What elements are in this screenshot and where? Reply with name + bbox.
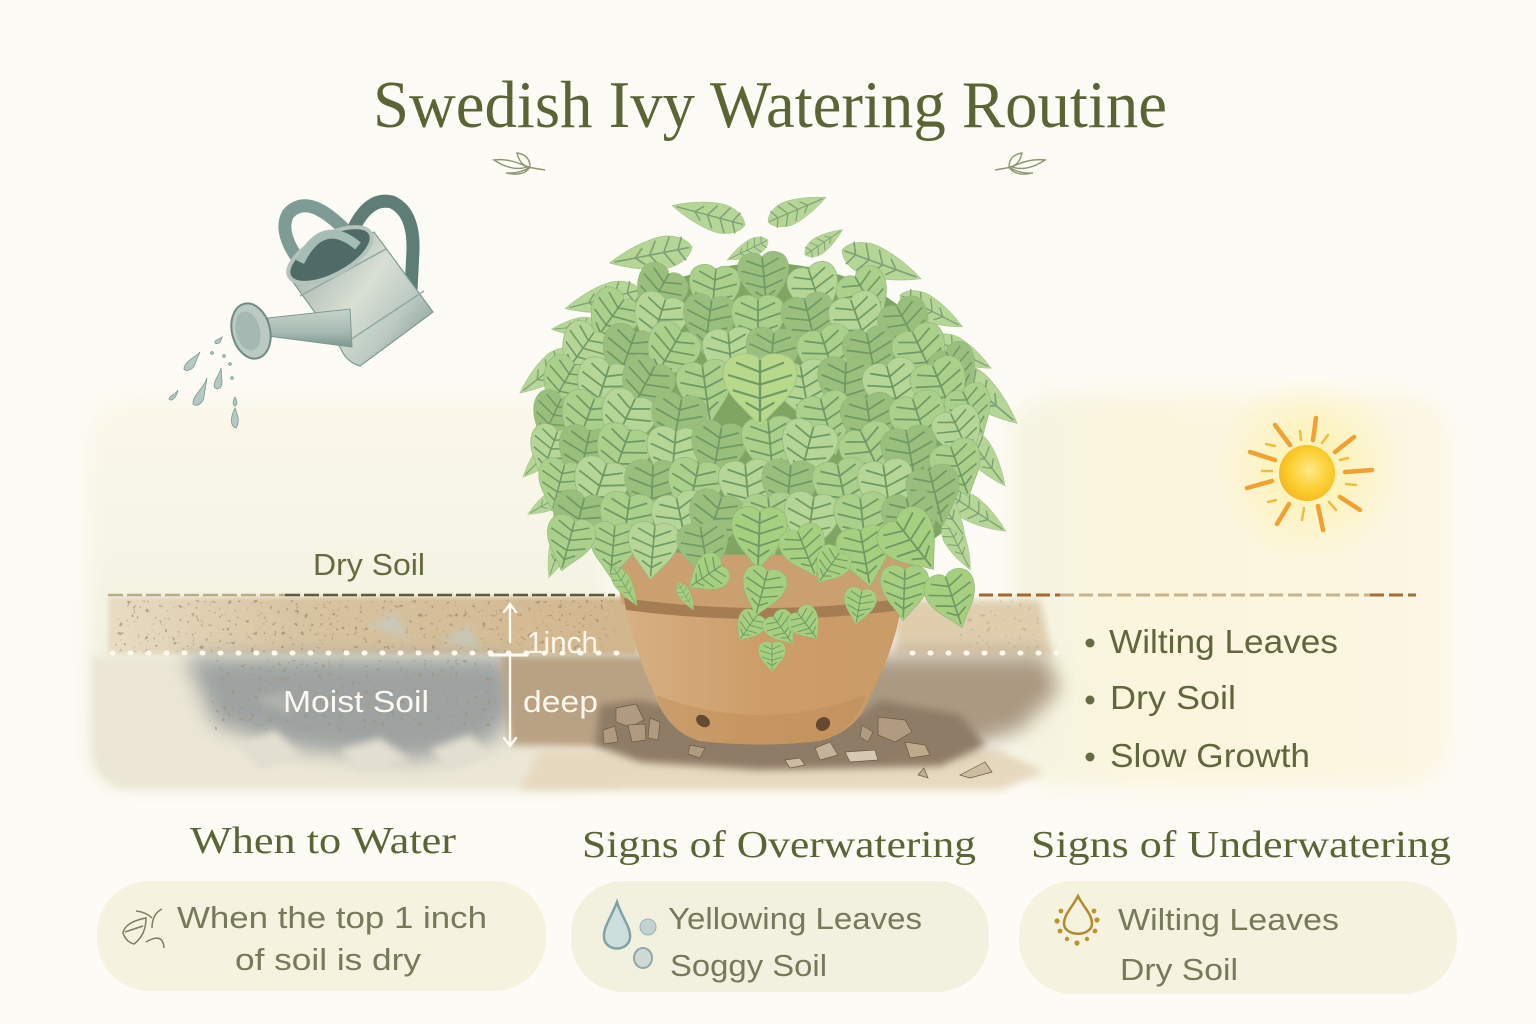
icon: sun: [1215, 375, 1405, 565]
label: moist soil: Moist Soil: [283, 684, 429, 719]
right list: dry symptoms: [1086, 623, 1338, 774]
illustration: potted Swedish ivy: [512, 186, 1028, 778]
icon: drop with sun: [1054, 896, 1100, 946]
panel: signs of overwatering: Soggy Soil: [670, 948, 827, 983]
right list: dry symptoms: Slow Growth: [1110, 737, 1310, 774]
label: 1 inch: 1inch: [527, 625, 598, 660]
panel: signs of overwatering: Yellowing Leaves: [668, 901, 922, 936]
right list: dry symptoms: Dry Soil: [1110, 679, 1236, 716]
foliage mass: [545, 262, 975, 555]
terracotta pot: [610, 508, 915, 744]
depth arrow: 1 inch deep: [490, 604, 527, 746]
outer leaves: [512, 186, 1028, 581]
icon: water droplets: [604, 902, 656, 968]
panel: signs of underwatering: Dry Soil: [1120, 952, 1238, 987]
right sun wash panel: [1010, 395, 1448, 787]
left green wash panel: [88, 398, 608, 788]
panel: when to water: When the top 1 inch: [177, 900, 487, 935]
label: deep: deep: [523, 684, 598, 719]
heading: signs of underwatering: Signs of Underwatering: [1031, 824, 1451, 866]
label: dry soil: Dry Soil: [313, 547, 425, 582]
panel: when to water: [97, 820, 546, 991]
depth line: white dotted: [112, 650, 1066, 656]
icon: title leaf ornament right: [995, 153, 1045, 174]
panel: signs of overwatering: [571, 824, 989, 992]
pebbles: [603, 704, 992, 778]
heading: when to water: When to Water: [190, 820, 456, 862]
face leaves: [519, 250, 1004, 584]
centre heart leaf: [723, 354, 797, 426]
panel: signs of underwatering: Wilting Leaves: [1118, 902, 1339, 937]
panel: signs of underwatering: [1019, 824, 1457, 994]
soil specks: [115, 600, 615, 652]
surface line: dry soil dashed: [108, 594, 1416, 596]
panel: soil cross-section: [92, 597, 1060, 790]
icon: title leaf ornament left: [494, 153, 545, 174]
panel: when to water: of soil is dry: [235, 942, 422, 977]
heading: signs of overwatering: Signs of Overwatering: [582, 824, 976, 866]
right list: dry symptoms: Wilting Leaves: [1109, 623, 1338, 660]
hanging leaves: [606, 500, 986, 672]
title: Swedish Ivy Watering Routine: [373, 68, 1167, 142]
pale moist-soil flecks: [240, 612, 490, 775]
icon: sprout: [123, 909, 164, 948]
icon: water drops: [169, 337, 238, 428]
icon: watering can: [226, 201, 433, 366]
